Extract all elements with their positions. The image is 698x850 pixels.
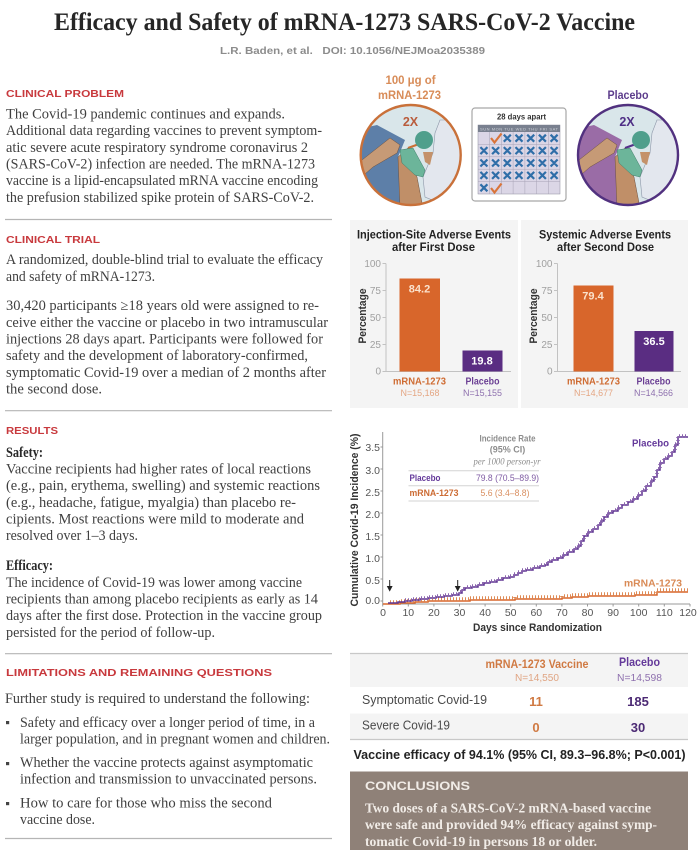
heading: results: RESULTS bbox=[6, 425, 58, 437]
text block: limitations intro: Further study is required to understand the following: bbox=[5, 691, 310, 707]
text block: trial design: and safety of mRNA-1273. bbox=[6, 269, 155, 285]
chart title: systemic bbox=[539, 230, 671, 254]
bar: placebo 36.5 bbox=[634, 331, 674, 372]
y axis: 1.5 bbox=[365, 531, 380, 543]
text block: trial participants: injections 28 days apart. Participants were followed for bbox=[6, 332, 323, 348]
axis: percentage: 50 bbox=[541, 313, 553, 324]
bar labels: N=15,168 bbox=[400, 388, 440, 399]
table header: N=14,598 bbox=[617, 673, 662, 684]
x axis: 120 bbox=[679, 607, 697, 619]
x axis: 50 bbox=[505, 607, 517, 619]
axis: percentage: 100 bbox=[536, 259, 553, 270]
curve: mRNA-1273 bbox=[383, 590, 688, 604]
text block: efficacy: recipients than among placebo recipients as early as 14 bbox=[6, 592, 318, 608]
text block: trial design bbox=[6, 252, 324, 285]
bullet list: remaining questions: Safety and efficacy over a longer period of time, in a bbox=[20, 715, 316, 731]
inset table: incidence rate: 79.8 (70.5–89.9) bbox=[476, 473, 539, 484]
icon: placebo injection circle bbox=[572, 104, 681, 210]
y axis: Cumulative Covid-19 Incidence (%) bbox=[349, 433, 361, 606]
vaccine efficacy statement: Vaccine efficacy of 94.1% (95% CI, 89.3–96.8%; P<0.001) bbox=[354, 747, 686, 762]
inset table: incidence rate: mRNA-1273 bbox=[410, 488, 458, 499]
panel: case count table bbox=[350, 653, 688, 740]
y axis: 2.5 bbox=[365, 487, 380, 499]
panel: injection-site adverse events bar chart bbox=[350, 220, 518, 408]
panel: clinical problem bbox=[6, 88, 322, 206]
label: vaccine dose: 100 μg of bbox=[386, 73, 436, 87]
heading: limitations: LIMITATIONS AND REMAINING QUESTIONS bbox=[6, 667, 272, 679]
row: symptomatic Covid-19: 185 bbox=[627, 694, 649, 709]
text block: clinical problem body: the prefusion stabilized spike protein of SARS-CoV-2. bbox=[6, 190, 314, 206]
text block: efficacy: Efficacy: bbox=[6, 558, 53, 574]
bullet list: remaining questions: Whether the vaccine protects against asymptomatic bbox=[20, 755, 313, 771]
text block: clinical problem body: atic severe acute respiratory syndrome coronavirus 2 bbox=[6, 140, 308, 156]
byline and DOI: L.R. Baden, et al. DOI: 10.1056/NEJMoa2035389 bbox=[220, 45, 485, 57]
text block: efficacy: The incidence of Covid-19 was lower among vaccine bbox=[6, 575, 302, 591]
axis: percentage: 100 bbox=[364, 259, 381, 270]
axis: percentage: Percentage bbox=[357, 288, 369, 344]
curve: placebo bbox=[388, 436, 688, 603]
text block: trial participants: safety and the development of laboratory-confirmed, bbox=[6, 348, 308, 364]
panel: clinical trial bbox=[6, 234, 328, 398]
text block: conclusions body: were safe and provided 94% efficacy against symp- bbox=[365, 818, 657, 833]
bar: mRNA-1273 84.2 bbox=[400, 278, 440, 372]
axis: percentage: 75 bbox=[541, 286, 553, 297]
panel: trial design illustration bbox=[355, 73, 681, 210]
panel: limitations and remaining questions bbox=[5, 667, 330, 828]
bullet list: remaining questions bbox=[6, 715, 330, 828]
axis: percentage: 0 bbox=[375, 366, 381, 378]
x axis: 40 bbox=[479, 607, 491, 619]
y axis: 0.5 bbox=[365, 575, 380, 587]
text block: trial design: A randomized, double-blind trial to evaluate the efficacy bbox=[6, 252, 324, 268]
row: severe Covid-19: 0 bbox=[532, 720, 540, 735]
row: symptomatic Covid-19 bbox=[362, 693, 649, 709]
text block: safety: (e.g., pain, erythema, swelling) and systemic reactions bbox=[6, 478, 320, 494]
bullet list: remaining questions: vaccine dose. bbox=[20, 812, 95, 828]
text block: safety: Vaccine recipients had higher rates of local reactions bbox=[6, 462, 311, 478]
text block: safety: Safety: bbox=[6, 445, 43, 461]
x axis: 0 bbox=[380, 607, 386, 619]
text block: trial participants: ceive either the vaccine or placebo in two intramuscular bbox=[6, 315, 328, 331]
inset table: incidence rate: Placebo bbox=[410, 473, 441, 484]
text block: efficacy bbox=[6, 558, 322, 641]
axis: percentage: 50 bbox=[370, 313, 381, 324]
panel: systemic adverse events bar chart bbox=[521, 220, 688, 408]
panel: results bbox=[6, 425, 322, 641]
icon: calendar 28 days apart: SUN MON TUE WED THU FRI SAT bbox=[480, 126, 559, 132]
inset table: incidence rate: 5.6 (3.4–8.8) bbox=[480, 488, 530, 499]
axis: percentage bbox=[357, 259, 511, 378]
x axis: 80 bbox=[582, 607, 593, 619]
text block: clinical problem body: vaccine is a lipid-encapsulated mRNA vaccine encoding bbox=[6, 173, 318, 189]
table header bbox=[486, 657, 662, 684]
text block: conclusions body: tomatic Covid-19 in persons 18 or older. bbox=[365, 835, 597, 850]
bar labels: N=15,155 bbox=[463, 388, 502, 399]
text block: clinical problem body bbox=[6, 106, 322, 206]
bar labels bbox=[393, 376, 502, 399]
x axis: 100 bbox=[630, 607, 648, 619]
text block: safety bbox=[6, 445, 320, 544]
heading: conclusions: CONCLUSIONS bbox=[365, 781, 470, 793]
y axis: 0.0 bbox=[365, 595, 380, 607]
text block: trial participants: the second dose. bbox=[6, 382, 102, 398]
x axis: 60 bbox=[530, 607, 542, 619]
x axis: 70 bbox=[556, 607, 568, 619]
y axis: 3.5 bbox=[365, 442, 380, 454]
bar: mRNA-1273 79.4: 79.4 bbox=[582, 290, 605, 302]
title: Efficacy and Safety of mRNA-1273 SARS-CoV-2 Vaccine bbox=[54, 9, 635, 36]
inset table: incidence rate: per 1000 person-yr bbox=[473, 458, 541, 468]
row: symptomatic Covid-19: 11 bbox=[529, 694, 543, 709]
table header: N=14,550 bbox=[515, 673, 559, 684]
inset table: incidence rate bbox=[408, 434, 541, 501]
chart title: systemic: after Second Dose bbox=[557, 242, 654, 254]
bar: mRNA-1273 79.4 bbox=[574, 286, 614, 372]
panel: cumulative incidence chart bbox=[349, 432, 697, 634]
y axis: 2.0 bbox=[365, 509, 380, 521]
label: vaccine dose bbox=[378, 73, 441, 102]
text block: trial participants: 30,420 participants ≥18 years old were assigned to re- bbox=[6, 298, 319, 314]
text block: clinical problem body: (SARS-CoV-2) infection are needed. The mRNA-1273 bbox=[6, 156, 315, 172]
bar: placebo 36.5: 36.5 bbox=[643, 336, 665, 348]
heading: clinical trial: CLINICAL TRIAL bbox=[6, 234, 101, 246]
bar: placebo 19.8 bbox=[462, 350, 502, 372]
bullet list: remaining questions: How to care for those who miss the second bbox=[20, 796, 272, 812]
icon: calendar 28 days apart bbox=[472, 108, 566, 201]
bar: mRNA-1273 84.2: 84.2 bbox=[409, 284, 430, 296]
axis: percentage bbox=[528, 259, 681, 378]
row: severe Covid-19: Severe Covid-19 bbox=[362, 718, 450, 732]
text block: safety: (e.g., headache, fatigue, myalgia) than placebo re- bbox=[6, 495, 296, 511]
text block: safety: resolved over 1–3 days. bbox=[6, 528, 138, 544]
icon: placebo injection circle: 2X bbox=[619, 115, 635, 129]
bar labels: N=14,677 bbox=[574, 388, 613, 399]
bar labels: Placebo bbox=[636, 376, 670, 388]
bar labels: mRNA-1273 bbox=[567, 376, 620, 388]
y axis: 1.0 bbox=[365, 553, 380, 565]
y axis: 3.0 bbox=[365, 465, 380, 477]
chart title: systemic: Systemic Adverse Events bbox=[539, 230, 671, 242]
bar labels: Placebo bbox=[466, 376, 500, 388]
icon: calendar 28 days apart: 28 days apart bbox=[497, 112, 546, 122]
row: symptomatic Covid-19: Symptomatic Covid-19 bbox=[362, 693, 487, 707]
icon: vaccine injection circle: 2X bbox=[403, 115, 419, 129]
text block: efficacy: days after the first dose. Protection in the vaccine group bbox=[6, 608, 322, 624]
chart title: injection-site: Injection-Site Adverse Events bbox=[357, 230, 511, 242]
x axis: 110 bbox=[656, 607, 673, 619]
x axis: 10 bbox=[402, 607, 414, 619]
bar labels: mRNA-1273 bbox=[393, 376, 446, 388]
x axis: Days since Randomization bbox=[473, 622, 602, 634]
x axis: 20 bbox=[428, 607, 440, 619]
axis: percentage: 25 bbox=[370, 340, 381, 351]
text block: safety: cipients. Most reactions were mild to moderate and bbox=[6, 512, 304, 528]
x axis: 30 bbox=[454, 607, 465, 619]
label: placebo: Placebo bbox=[608, 88, 648, 102]
heading: clinical problem: CLINICAL PROBLEM bbox=[6, 88, 124, 100]
text block: trial participants bbox=[6, 298, 328, 398]
axis: percentage: Percentage bbox=[528, 288, 540, 344]
axis: percentage: 0 bbox=[547, 366, 553, 378]
bullet list: remaining questions: infection and transmission to unvaccinated persons. bbox=[20, 772, 317, 788]
x axis: 90 bbox=[607, 607, 619, 619]
bullet list: remaining questions: larger population, and in pregnant women and children. bbox=[20, 732, 330, 748]
bar: placebo 19.8: 19.8 bbox=[471, 356, 493, 368]
text block: conclusions body bbox=[365, 802, 657, 850]
chart title: injection-site: after First Dose bbox=[392, 242, 475, 254]
text block: trial participants: symptomatic Covid-19 over a median of 2 months after bbox=[6, 365, 326, 381]
inset table: incidence rate: Incidence Rate bbox=[480, 434, 536, 444]
axis: percentage: 25 bbox=[541, 340, 553, 351]
x axis bbox=[380, 604, 697, 634]
axis: percentage: 75 bbox=[370, 286, 381, 297]
label: vaccine dose: mRNA-1273 bbox=[378, 88, 441, 102]
text block: clinical problem body: Additional data regarding vaccines to prevent symptom- bbox=[6, 123, 322, 139]
table header: Placebo bbox=[619, 657, 660, 669]
curve label: placebo: Placebo bbox=[632, 438, 669, 450]
bar labels: N=14,566 bbox=[634, 388, 673, 399]
arrow: first dose bbox=[388, 580, 392, 590]
y axis bbox=[349, 432, 690, 607]
row: severe Covid-19: 30 bbox=[631, 720, 645, 735]
row: severe Covid-19 bbox=[362, 718, 645, 735]
panel: conclusions bbox=[350, 772, 688, 850]
chart title: injection-site bbox=[357, 230, 511, 254]
text block: clinical problem body: The Covid-19 pandemic continues and expands. bbox=[6, 106, 285, 122]
bar labels bbox=[567, 376, 673, 399]
icon: vaccine injection circle bbox=[355, 104, 464, 210]
curve label: mRNA-1273: mRNA-1273 bbox=[624, 578, 682, 590]
table header: mRNA-1273 Vaccine bbox=[486, 659, 588, 671]
inset table: incidence rate: (95% CI) bbox=[490, 444, 525, 454]
text block: efficacy: persisted for the period of follow-up. bbox=[6, 625, 215, 641]
text block: conclusions body: Two doses of a SARS-CoV-2 mRNA-based vaccine bbox=[365, 802, 651, 816]
arrow: second dose bbox=[456, 580, 460, 590]
